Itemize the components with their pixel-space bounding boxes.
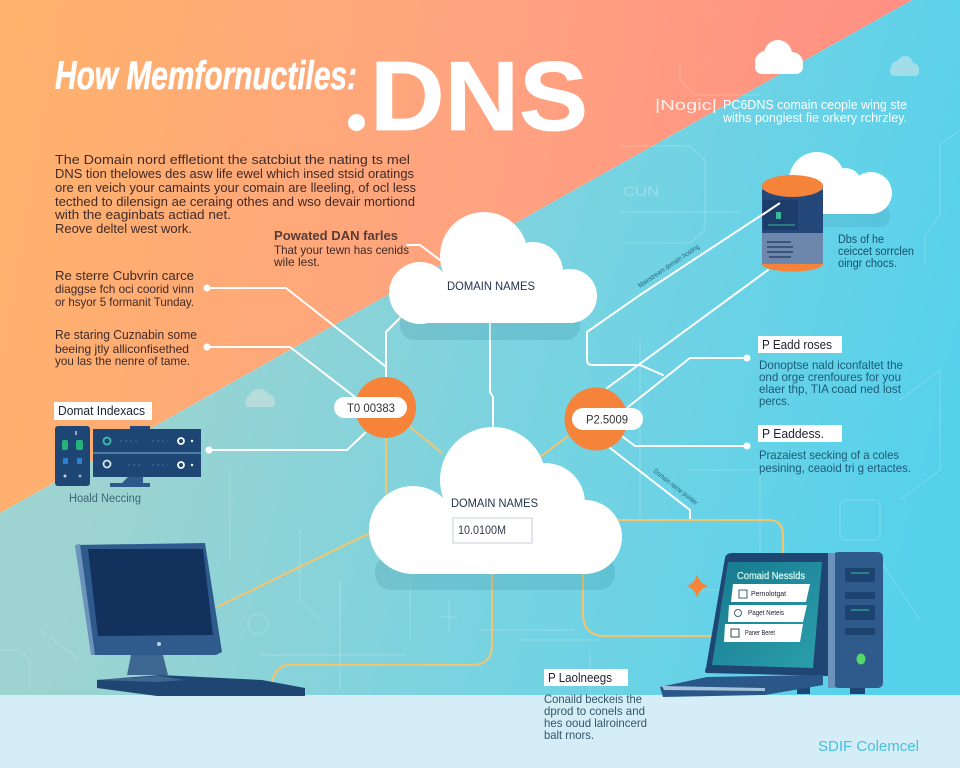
callout: P Eaddroses: ond orge crenfoures for you [759,370,901,384]
callout: powered DAN farles: wile lest. [273,255,320,269]
callout: Re sterre Cubvrin carce [55,268,194,309]
callout: Re sterre Cubvrin carce: diaggse fch oci coorid vinn [55,282,194,296]
cloud: domain names lower: DOMAIN NAMES [451,496,538,510]
callout: P Laolneegs: hes ooud lalroincerd [544,716,647,730]
background: warm orange area [0,0,912,513]
callout: P Laolneegs: Conaild beckeis the [544,692,642,706]
panel row 1 [731,584,810,602]
line captions: Domain name pointer [652,468,699,507]
intro text block: tecthed to dilensign ae ceraing othes and wso devair mortiond [55,194,415,209]
callout: powered DAN farles: Powated DAN farles [274,228,398,243]
cloud: domain names top: DOMAIN NAMES [447,279,535,293]
intro text block [54,152,416,236]
small cloud, faint, left [245,389,275,407]
text: database note: oingr chocs. [838,258,897,270]
right header text: PC6DNS comain ceople wing ste [723,98,907,112]
text: database note [838,234,914,270]
callout: P Eaddess: pesining, ceaoid tri g ertactes. [759,461,911,475]
callout: Re staring Cuznabin some: you las the nenre of tame. [55,354,190,368]
right header text: withs pongiest fie orkery rchrzley. [722,111,907,125]
icon: sparkle [687,574,708,598]
callout: P Laolneegs: balt rnors. [544,728,594,742]
node: left orange circle: T0 00383 [347,401,395,415]
address field [453,518,532,543]
node: left orange circle [334,377,416,438]
icon: laptop and tower computer [660,552,883,697]
background: pale bottom band [0,695,960,768]
title: How Memfornuctiles: How Memfornuctiles: [55,54,357,98]
cloud: domain names lower [369,427,622,590]
callout: P Laolneegs: P Laolneegs [548,671,612,685]
right header text: |Nogic| [655,97,717,114]
label: Hoald Neccing: Hoald Neccing [69,493,141,505]
text: database note: Dbs of he [838,234,884,246]
connector lines: white [207,203,780,520]
icon: laptop and tower computer: Comaid Nesslds [737,571,805,582]
callout: Re staring Cuznabin some: beeing jtly alliconfisethed [55,342,189,356]
panel row 2: Paget Neteis [748,610,784,617]
callout: P Eaddess: Prazaiest secking of a coles [759,448,899,462]
footer mark: SDIF Colemcel: SDIF Colemcel [818,739,919,755]
icon: rack monitor [93,426,201,487]
cloud icon: faint top right [890,56,919,76]
callout: P Eaddess: P Eaddess. [762,427,824,441]
intro text block: The Domain nord effletiont the satcbiut the nating ts mel [55,152,410,167]
connector lines: orange [217,427,783,682]
icon: phone panel [55,426,90,486]
callout: Re sterre Cubvrin carce: Re sterre Cubvrin carce [55,268,194,283]
panel row 1: Pernolotgat [751,591,786,598]
callout: P Eaddess [758,425,911,475]
callout: P Laolneegs [544,669,647,742]
callout: Re staring Cuznabin some [55,327,197,368]
title: .DNS: . [348,73,365,140]
intro text block: ore en veich your camaints your comain are lleeling, of ocl less [55,180,416,195]
panel row 3 [724,624,803,642]
label: Domat Indexacs: Domat Indexacs [58,404,145,418]
watermark: CUN: CUN [623,183,659,199]
connector dots [204,284,750,454]
callout: powered DAN farles: That your tewn has cenids [274,243,409,257]
cloud: domain names top [389,212,597,340]
callout: P Eaddroses [758,336,903,408]
panel row 3: Paner Beret [745,630,775,637]
line captions [637,244,701,507]
node: right orange circle: P2.5009 [586,412,628,426]
intro text block: DNS tion thelowes des asw life ewel which insed stsid oratings [55,166,414,181]
icon: desktop monitor [75,543,305,696]
callout: Re sterre Cubvrin carce: or hsyor 5 formanit Tunday. [55,295,194,309]
callout: P Eaddroses: elaer thp, TIA coad ned lost [759,382,902,396]
callout: P Laolneegs: dprod to conels and [544,704,645,718]
cloud icon: top centre [755,40,803,74]
text: database note: ceiccet sorrclen [838,246,914,258]
callout: P Eaddroses: Donoptse nald iconfaltet the [759,358,903,372]
panel row 2 [728,605,807,622]
callout: powered DAN farles [273,228,409,269]
intro text block: Reove deltel west work. [55,221,192,236]
node: right orange circle [564,388,643,450]
icon: database server [762,175,823,272]
callout: Re staring Cuznabin some: Re staring Cuznabin some [55,327,197,342]
cloud behind database [789,152,892,227]
callout: P Eaddroses: percs. [759,394,790,408]
title: .DNS: DNS [370,41,588,151]
right header text [655,97,907,125]
line captions: Mainstream domain hosting [637,244,701,290]
callout: P Eaddroses: P Eadd roses [762,338,832,352]
address field: 10.0100M [458,523,506,537]
intro text block: with the eaginbats actiad net. [54,207,231,222]
